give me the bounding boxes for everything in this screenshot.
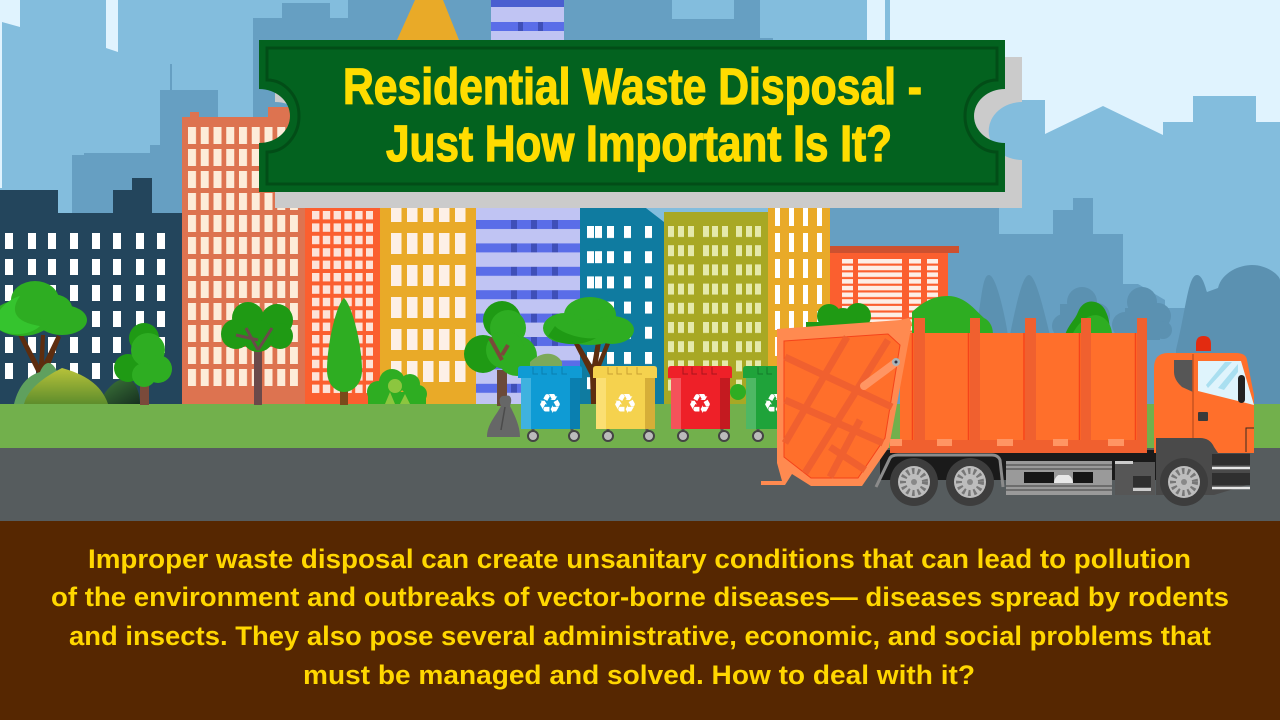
building: periwinkle tower — [476, 0, 580, 404]
title text — [343, 58, 922, 172]
truck cab — [1154, 353, 1254, 453]
tree: round with trunk — [114, 323, 172, 405]
recycling bin: red: ♻ — [688, 389, 712, 420]
far skyline — [0, 0, 1280, 404]
recycling bin: green — [743, 366, 790, 441]
truck bumper and arch — [1156, 438, 1250, 495]
recycling bin: blue: ♻ — [538, 389, 562, 420]
building: salmon tower — [182, 107, 305, 404]
recycling bin: green: ♻ — [763, 389, 787, 420]
recycling bin: yellow — [593, 366, 657, 441]
bush: small flowering — [367, 369, 427, 404]
tree: cypress — [327, 298, 362, 405]
recycling bin: red — [668, 366, 732, 441]
description text: Improper waste disposal can create unsanitary conditions that can lead to pollution — [88, 544, 1191, 574]
description text: and insects. They also pose several administrative, economic, and social problems that — [69, 621, 1211, 651]
truck container body — [890, 318, 1147, 453]
building: yellow tower — [380, 0, 476, 404]
green shrubs behind truck — [806, 296, 1112, 336]
title sign — [259, 40, 1022, 208]
tree: wide canopy behind bins — [543, 297, 634, 404]
small bush by green bin — [730, 384, 746, 400]
truck rear door — [761, 318, 912, 486]
background sky — [0, 0, 1280, 521]
mid skyline — [72, 0, 1280, 404]
title text: Just How Important Is It? — [386, 115, 892, 172]
recycling bin: yellow: ♻ — [613, 389, 637, 420]
sign inner border — [267, 48, 997, 184]
road — [0, 448, 1280, 521]
building: navy apartment block — [0, 178, 182, 404]
truck side box — [1006, 461, 1112, 495]
building: low orange block — [830, 246, 959, 353]
tree: branching — [221, 302, 293, 405]
description text — [51, 544, 1229, 690]
title text: Residential Waste Disposal - — [343, 58, 922, 115]
ground grass — [0, 404, 1280, 448]
recycling bin: blue — [518, 366, 582, 441]
building: olive tower — [664, 212, 768, 404]
distant tree silhouettes — [975, 265, 1280, 404]
bush: gradient shrubs — [14, 363, 140, 404]
icon: garbage bag — [487, 395, 520, 437]
bottom description panel — [0, 521, 1280, 720]
bush: behind bins — [530, 354, 562, 404]
building: teal tower — [580, 205, 664, 404]
tree: left large — [0, 281, 87, 404]
building: yellow narrow tower — [768, 205, 830, 404]
truck wheels — [890, 458, 1208, 506]
building: red-orange tower — [305, 205, 380, 404]
truck chassis — [880, 450, 1215, 480]
sign green plate — [259, 40, 1005, 192]
garbage truck — [761, 318, 1254, 506]
description text: of the environment and outbreaks of vector-borne diseases— diseases spread by rodents — [51, 582, 1229, 612]
truck rear fender — [876, 455, 1003, 487]
truck beacon — [1196, 336, 1211, 351]
tree: behind bins left — [464, 301, 537, 406]
description text: must be managed and solved. How to deal with it? — [303, 660, 975, 690]
sign shadow plate — [275, 57, 1022, 208]
truck fuel tank — [1115, 461, 1155, 495]
